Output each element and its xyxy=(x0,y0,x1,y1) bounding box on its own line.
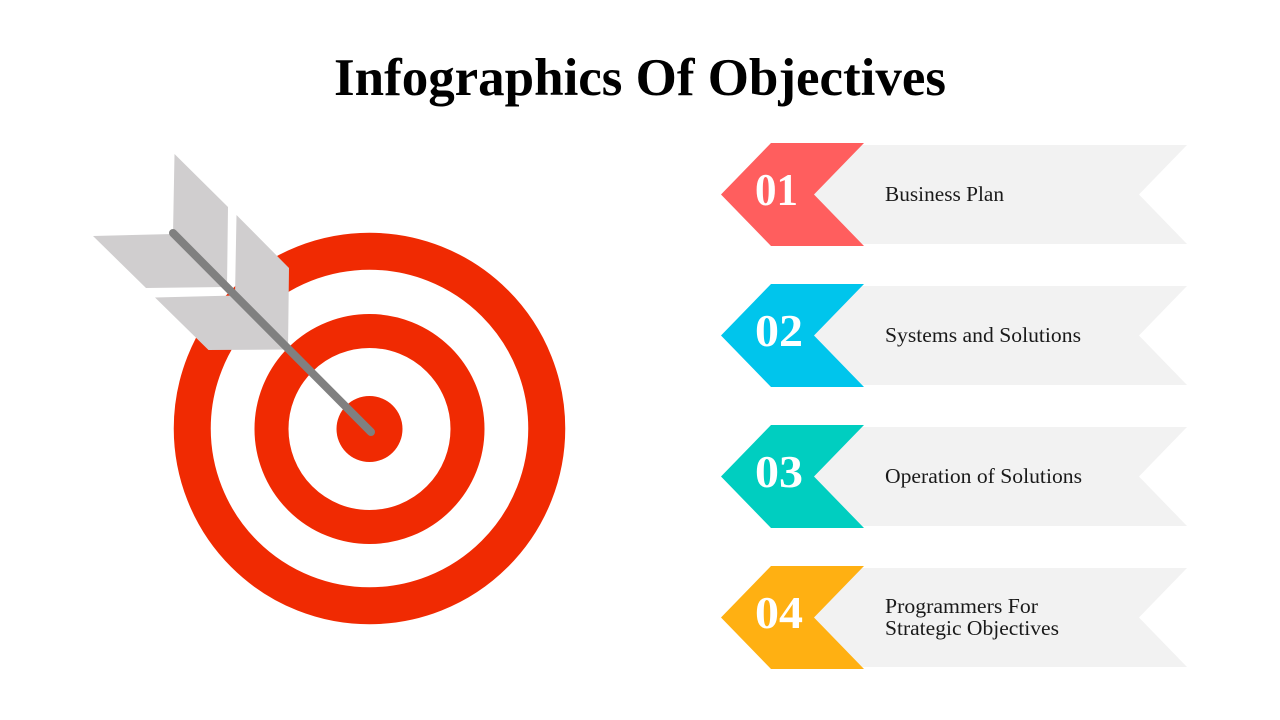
arrow: shaft xyxy=(173,233,371,432)
number 02: 02 xyxy=(755,305,803,356)
chevron 04 xyxy=(721,566,864,669)
arrow: lower fletching xyxy=(155,215,289,350)
title: Infographics Of Objectives xyxy=(334,49,946,107)
item 03 xyxy=(721,425,1187,528)
label 04: Programmers For xyxy=(885,594,1038,618)
target: bullseye xyxy=(336,396,402,462)
item 01 xyxy=(721,143,1187,246)
ribbon 02 xyxy=(812,286,1187,385)
ribbon 01 xyxy=(812,145,1187,244)
number 01: 01 xyxy=(755,164,798,215)
number 04: 04 xyxy=(755,587,803,638)
item 02 xyxy=(721,284,1187,387)
chevron 02 xyxy=(721,284,864,387)
target with arrow xyxy=(93,154,547,606)
item 04 xyxy=(721,566,1187,669)
chevron 01 xyxy=(721,143,864,246)
label 03: Operation of Solutions xyxy=(885,464,1082,488)
target: outer ring xyxy=(192,251,547,606)
number 03: 03 xyxy=(755,446,803,497)
target: middle ring xyxy=(272,331,468,527)
label 02: Systems and Solutions xyxy=(885,323,1081,347)
ribbon 03 xyxy=(812,427,1187,526)
icon: arrow xyxy=(93,154,371,432)
ribbon 04 xyxy=(812,568,1187,667)
label 04 second line: Strategic Objectives xyxy=(885,616,1059,640)
chevron 03 xyxy=(721,425,864,528)
arrow: upper fletching xyxy=(93,154,228,288)
label 01: Business Plan xyxy=(885,182,1005,206)
